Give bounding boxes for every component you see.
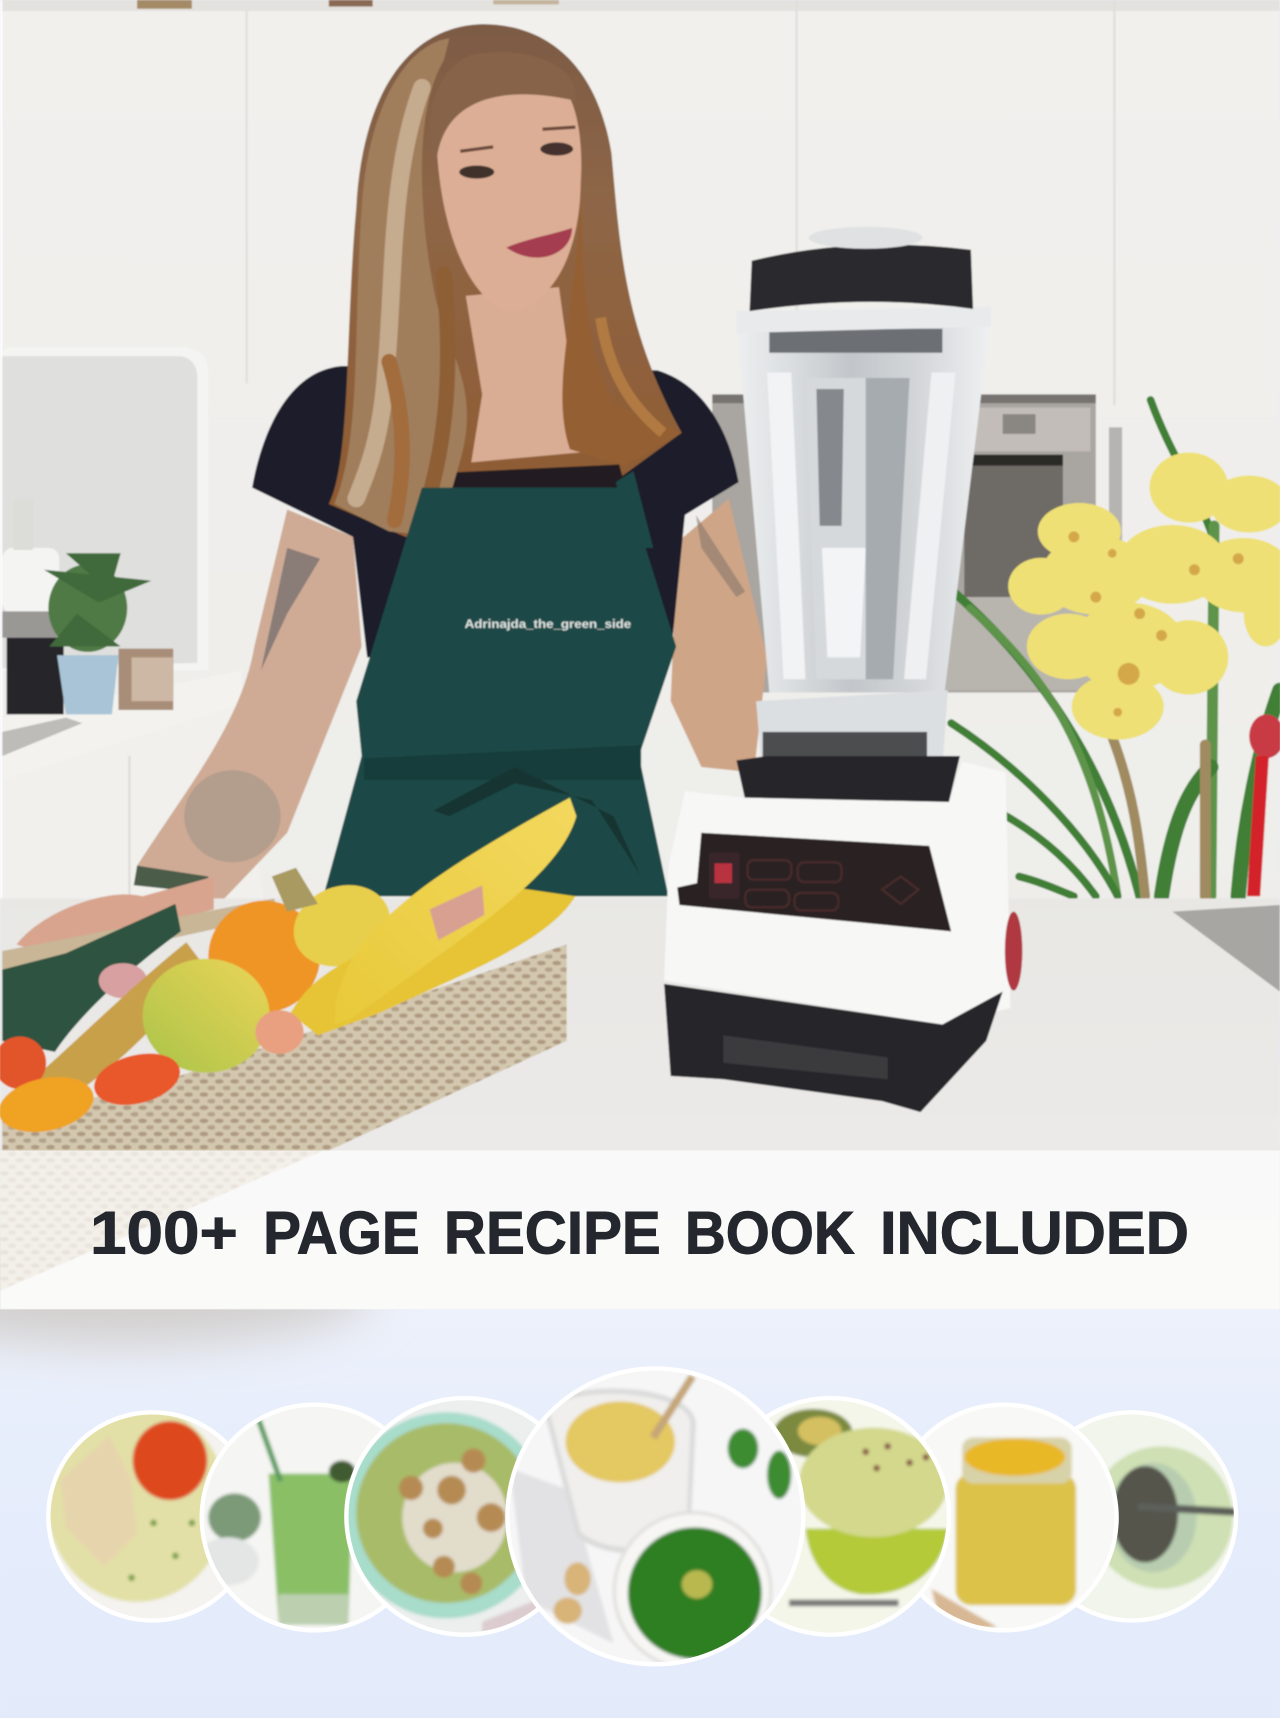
- hero kitchen photo: [0, 0, 1280, 1309]
- induction hob: [1172, 905, 1280, 992]
- spinach leaves: [728, 1429, 758, 1468]
- small oranges: [0, 1036, 46, 1089]
- orchid flowers and leaves: [951, 400, 1280, 896]
- blender jar: [736, 318, 991, 692]
- banner heading: INCLUDED: [880, 1198, 1189, 1266]
- orange: [208, 901, 320, 1012]
- circle 3: green soup bowl: [344, 1396, 539, 1637]
- circle 7: chia pudding: [1075, 1410, 1238, 1622]
- recipe photo circles: [44, 1364, 1249, 1671]
- hand on basket: [17, 877, 214, 953]
- circle 6: yellow smoothie jar: [920, 1402, 1119, 1632]
- left banana: [33, 942, 203, 1085]
- blender: [664, 227, 1022, 1112]
- circle 4: nutritional yeast and green pesto: [504, 1364, 807, 1671]
- pesto bowl: [613, 1511, 773, 1671]
- basket body: [2, 944, 567, 1150]
- lime lemon: [143, 959, 270, 1073]
- basket shadow on lower background: [0, 1236, 373, 1345]
- woman: [134, 24, 767, 904]
- circle 5: avocado mash in green bowl: [766, 1396, 951, 1637]
- right arm: [671, 499, 767, 772]
- apron text: Adrinajda_the_green_side: [465, 617, 632, 631]
- face: [436, 76, 581, 311]
- basket seen below: [0, 1150, 323, 1291]
- banner heading: 100+: [90, 1198, 238, 1266]
- left worktop, cutting board and lower cabinets: [2, 347, 263, 898]
- oven: [712, 394, 1122, 692]
- control panel: [677, 833, 951, 931]
- worktop: [0, 898, 1280, 1309]
- sheer neckline: [422, 465, 630, 509]
- fruit basket: [0, 798, 576, 1291]
- back banana: [290, 887, 575, 1035]
- kitchen wall cabinets: [0, 0, 1280, 1309]
- big banana: [334, 798, 576, 1024]
- left arm: [137, 509, 362, 904]
- leaves: [2, 904, 181, 1052]
- banner heading: PAGE: [263, 1198, 420, 1266]
- circle 1: couscous plate: [46, 1410, 228, 1622]
- yellow lemon: [282, 872, 402, 980]
- blender lid: [750, 245, 973, 311]
- lower pale blue background: [0, 1309, 1280, 1718]
- neck and chest: [466, 287, 592, 462]
- blender body: [664, 761, 1010, 1024]
- banner background: [0, 1150, 1280, 1309]
- apron: [323, 488, 676, 896]
- basket back rim: [2, 898, 280, 975]
- white mug with yellow powder: [545, 1388, 696, 1554]
- hair back: [329, 24, 682, 537]
- banner heading: BOOK: [685, 1198, 855, 1266]
- black shirt: [252, 366, 739, 657]
- jar collar: [736, 756, 960, 802]
- banner heading: RECIPE: [444, 1198, 661, 1266]
- blender black base: [664, 984, 1003, 1112]
- circle 2: green smoothie glass: [200, 1402, 386, 1632]
- mixer and potted plant: [2, 500, 173, 714]
- hair front: [334, 38, 467, 537]
- cashews: [564, 1562, 591, 1595]
